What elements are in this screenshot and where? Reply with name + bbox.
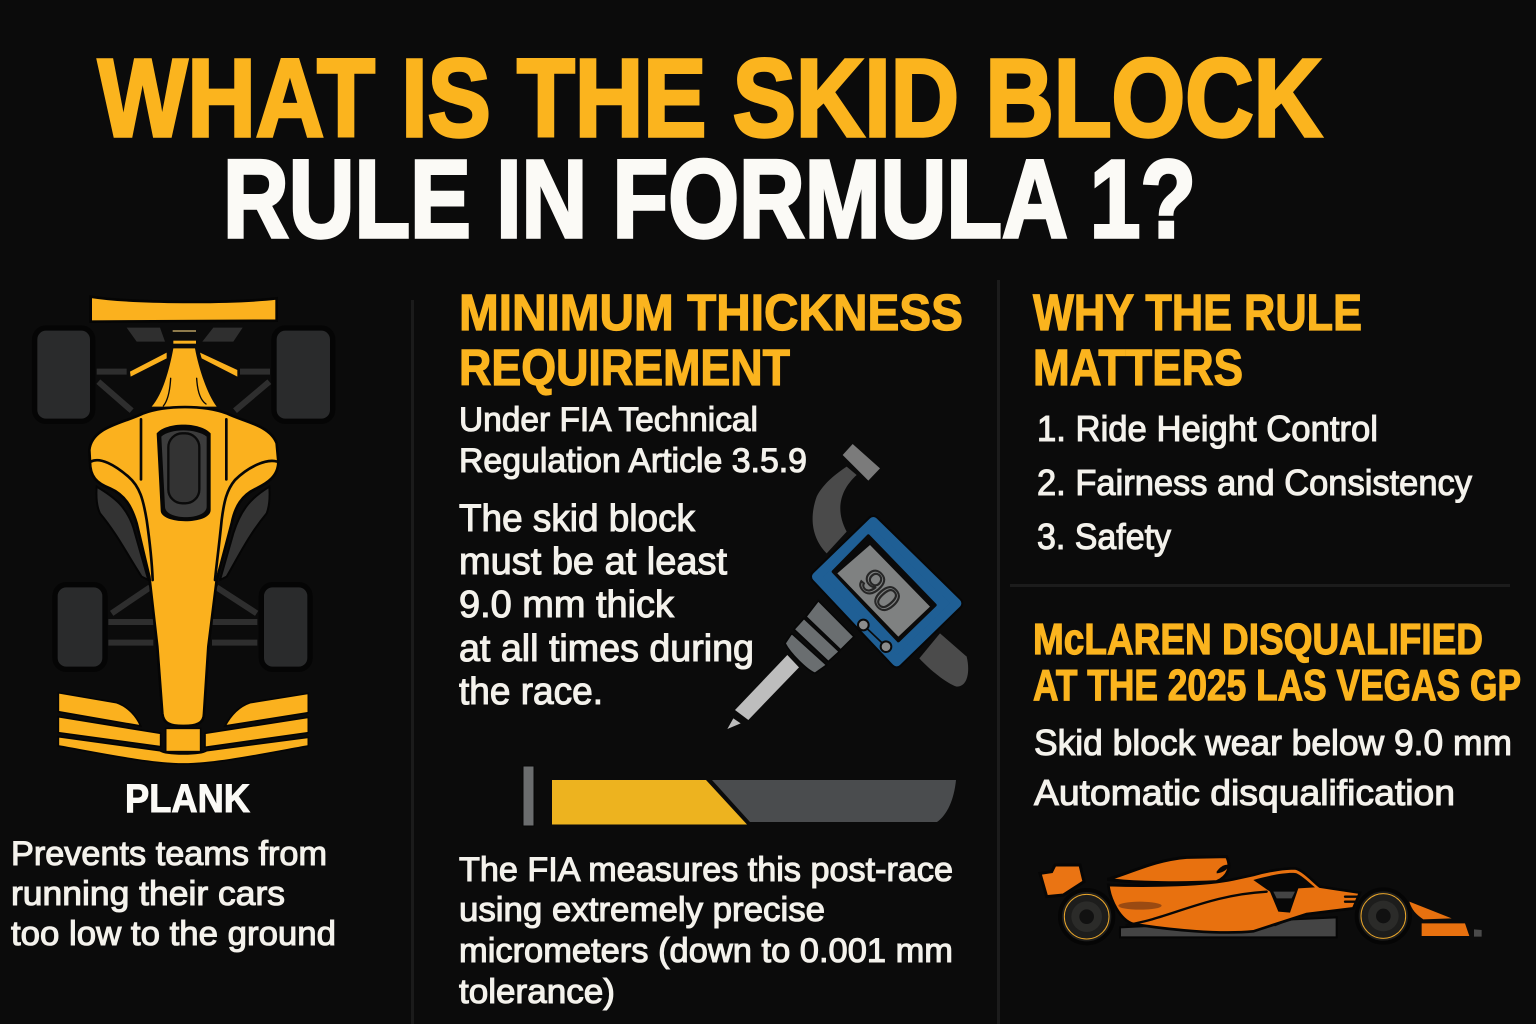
- sidepod shadows: [96, 487, 148, 580]
- panel: McLaren disqualified: [1033, 615, 1521, 943]
- disqualification details: Skid block wear below 9.0 mm: [1034, 722, 1512, 763]
- thickness statement: The skid block: [459, 498, 696, 540]
- panel: plank: [11, 297, 336, 953]
- plank description: running their cars: [11, 875, 285, 913]
- heading: minimum thickness: MINIMUM THICKNESS: [459, 284, 963, 341]
- plank label: PLANK: [125, 777, 250, 821]
- measurement note: [459, 851, 953, 1011]
- measurement note: tolerance): [459, 973, 615, 1011]
- thickness statement: 9.0 mm thick: [459, 584, 675, 626]
- rear wing: [91, 297, 277, 322]
- heading: McLaren disqualified: [1033, 615, 1521, 710]
- regulation reference: Under FIA Technical: [459, 401, 758, 439]
- front wing: [58, 693, 308, 764]
- diagram: skid block wear bar: [523, 766, 956, 826]
- measurement note: The FIA measures this post-race: [459, 851, 953, 889]
- icon: digital micrometer: 90: [850, 562, 908, 620]
- heading: minimum thickness: REQUIREMENT: [459, 339, 790, 396]
- measurement note: micrometers (down to 0.001 mm: [459, 932, 953, 970]
- suspension arms: [97, 372, 270, 643]
- disqualification details: [1034, 722, 1512, 813]
- measurement note: using extremely precise: [459, 891, 825, 929]
- icon: orange side-view F1 car: [1040, 857, 1482, 943]
- plank description: Prevents teams from: [11, 835, 327, 873]
- title: [98, 37, 1322, 261]
- cockpit: [157, 425, 211, 521]
- thickness statement: the race.: [459, 671, 603, 713]
- chassis and nose: [89, 407, 278, 726]
- numbered reasons: [1037, 408, 1472, 557]
- disqualification details: Automatic disqualification: [1034, 772, 1455, 813]
- thickness statement: [459, 498, 754, 713]
- tyres: [35, 328, 333, 669]
- numbered reasons: 2. Fairness and Consistency: [1037, 462, 1472, 503]
- numbered reasons: 3. Safety: [1037, 516, 1171, 557]
- thickness statement: must be at least: [459, 541, 727, 583]
- heading: why the rule matters: WHY THE RULE: [1033, 284, 1362, 341]
- panel: minimum thickness requirement: [459, 284, 968, 1011]
- panel: why the rule matters: [1033, 284, 1472, 557]
- regulation reference: [459, 401, 807, 480]
- regulation reference: Regulation Article 3.5.9: [459, 442, 807, 480]
- heading: minimum thickness: [459, 284, 963, 396]
- thickness statement: at all times during: [459, 628, 754, 670]
- heading: why the rule matters: [1033, 284, 1362, 396]
- numbered reasons: 1. Ride Height Control: [1037, 408, 1378, 449]
- body lines: [91, 419, 277, 580]
- engine fin: [152, 348, 217, 407]
- heading: why the rule matters: MATTERS: [1033, 339, 1243, 396]
- plank description: [11, 835, 336, 953]
- icon: digital micrometer: [727, 444, 968, 729]
- icon: top-down yellow F1 car: [35, 297, 333, 764]
- rear bodywork: [127, 328, 243, 342]
- title: RULE IN FORMULA 1?: [223, 138, 1196, 261]
- title: WHAT IS THE SKID BLOCK: [98, 37, 1322, 160]
- plank description: too low to the ground: [11, 915, 336, 953]
